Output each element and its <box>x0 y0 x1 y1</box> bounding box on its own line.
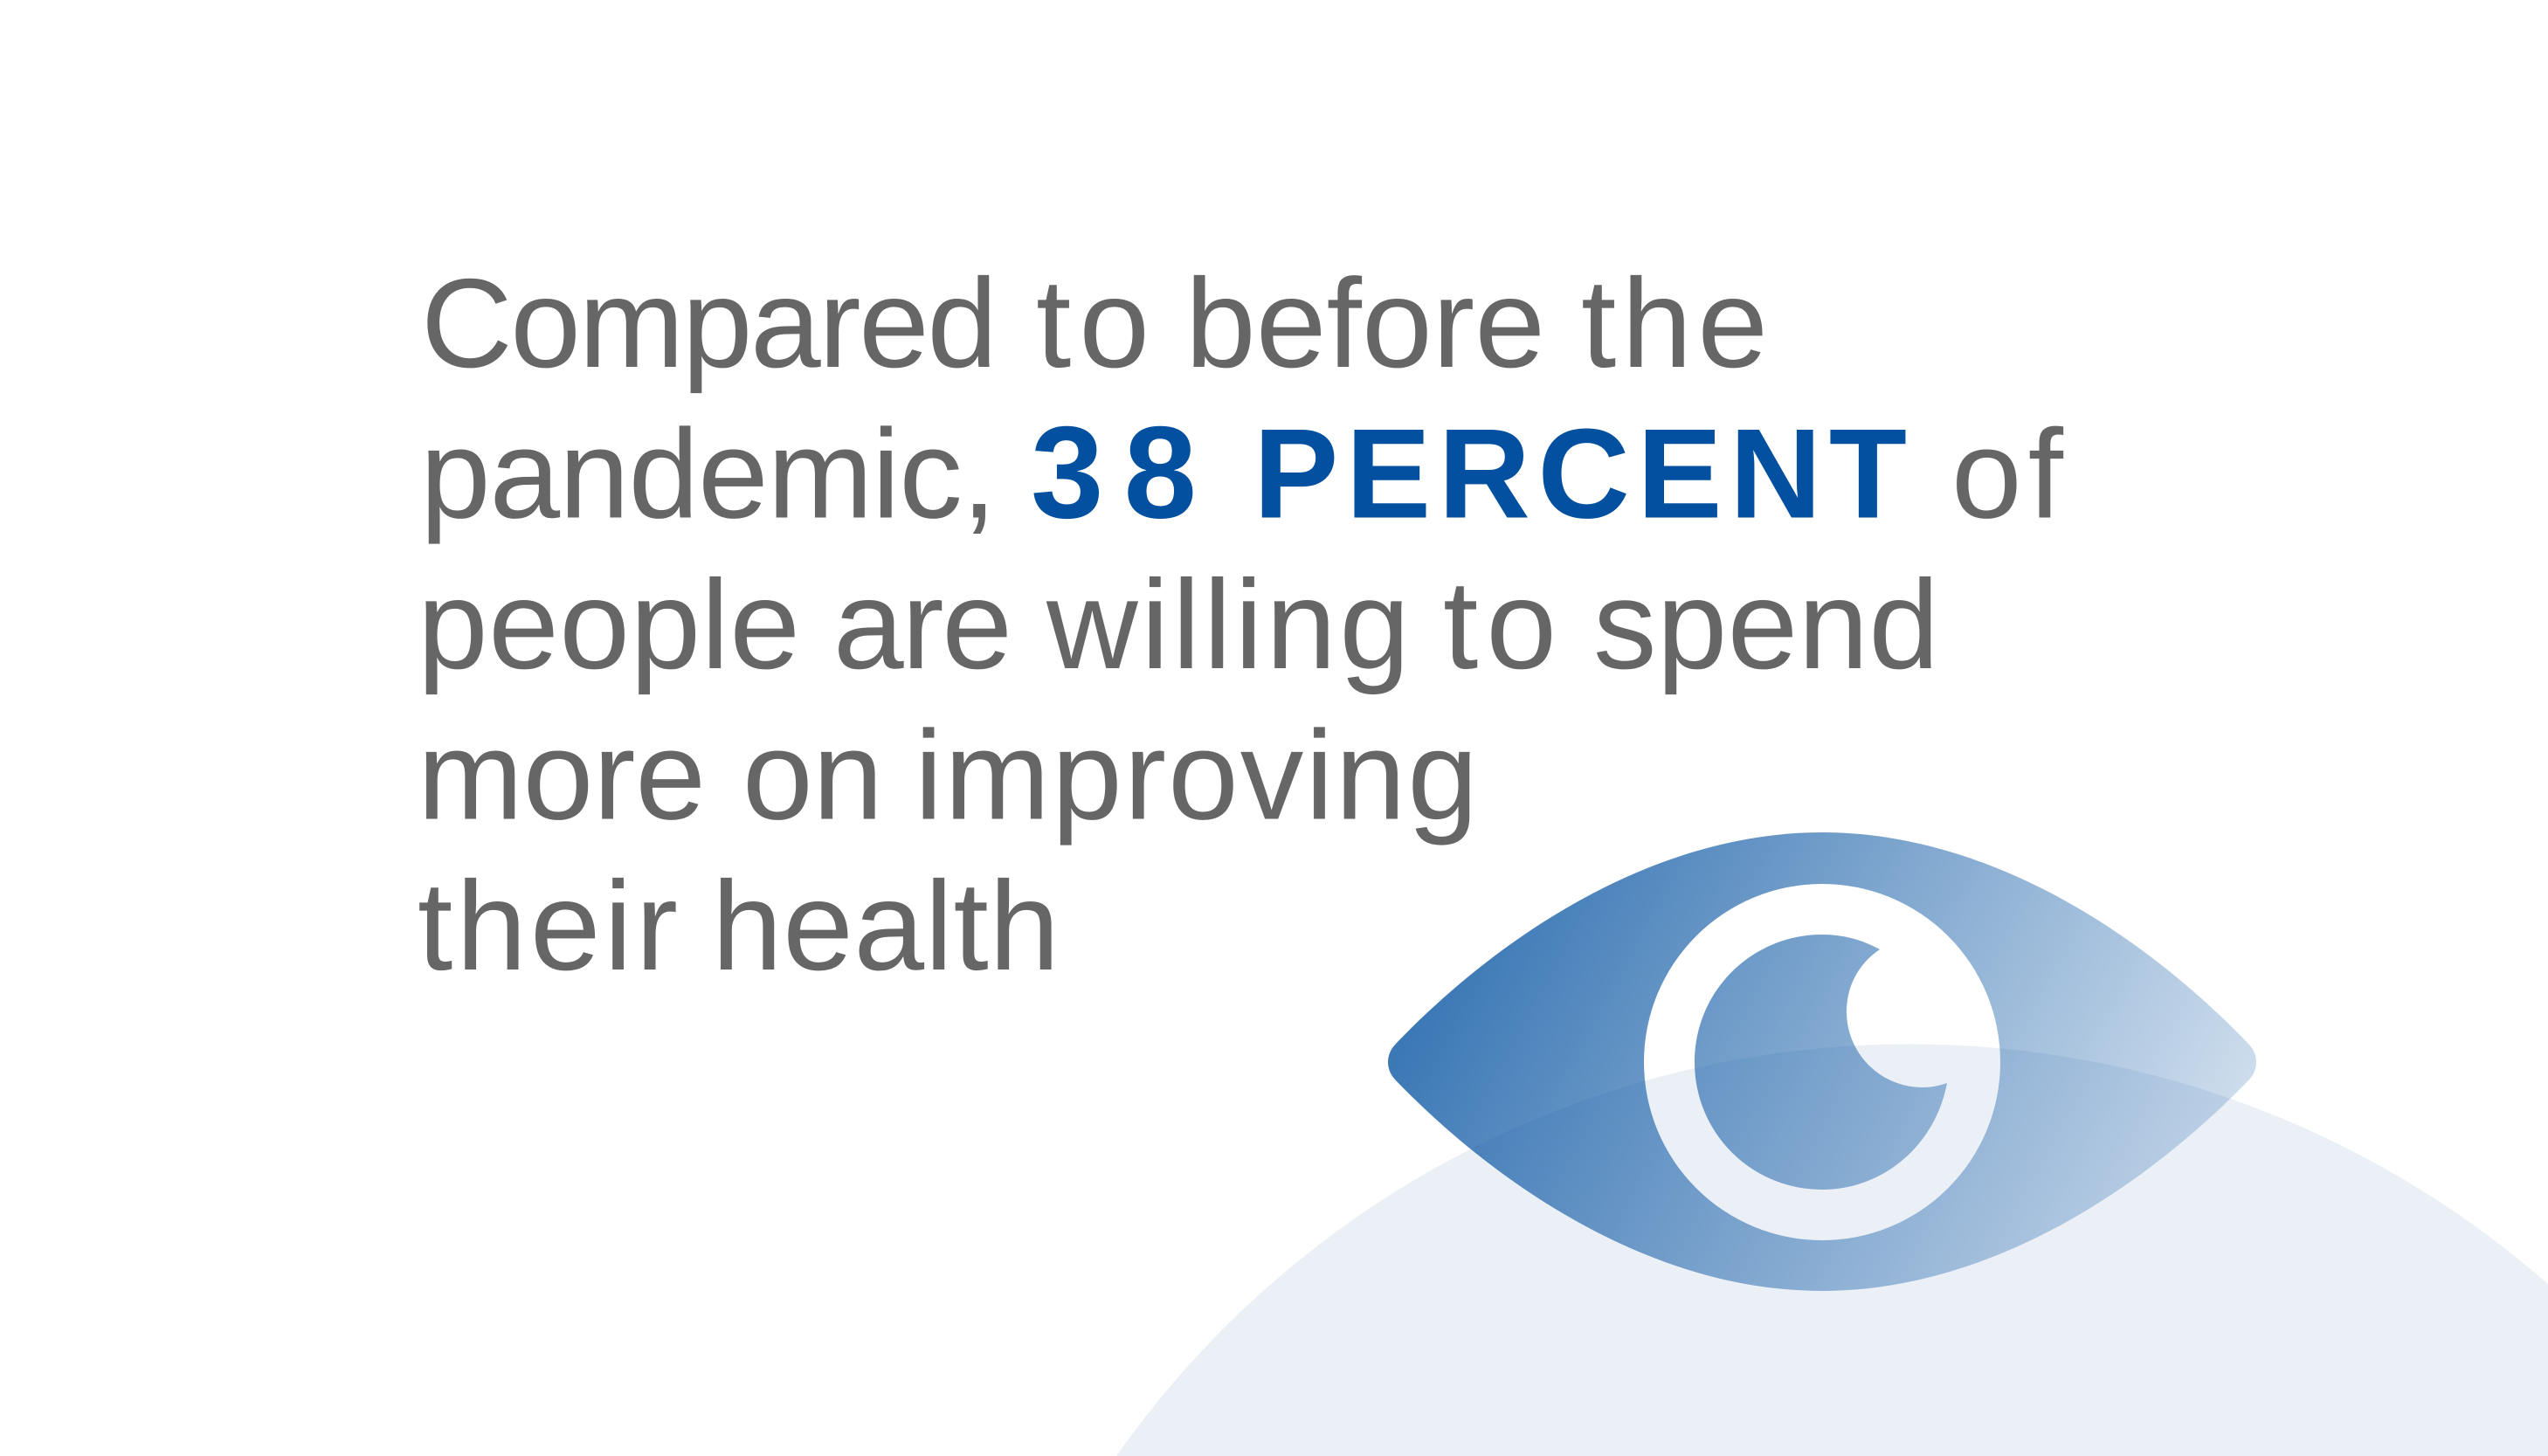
line 3 <box>418 554 1939 695</box>
highlight: 38 percent: 38 <box>1031 398 1197 545</box>
highlight: 38 percent: PERCENT <box>1253 402 1907 545</box>
line 2: of: of <box>1951 404 2064 545</box>
line 4: improving <box>915 704 1478 845</box>
icon: eye <box>1388 832 2256 1291</box>
line 5: health <box>712 855 1060 997</box>
line 1 <box>421 252 1768 394</box>
line 1: the <box>1581 252 1768 394</box>
background circle <box>1116 1044 2548 1456</box>
line 3: willing <box>1046 554 1410 695</box>
statement text <box>418 252 2064 997</box>
line 5: their <box>418 855 678 997</box>
line 3: people <box>418 554 800 695</box>
line 2: pandemic: pandemic, <box>420 404 997 545</box>
line 1: Compared <box>421 252 998 394</box>
line 1: to <box>1036 252 1150 394</box>
line 3: spend <box>1593 554 1939 695</box>
line 4 <box>418 704 1478 845</box>
line 3: to <box>1443 554 1557 695</box>
line 1: before <box>1185 252 1545 394</box>
line 4: more <box>418 704 706 845</box>
line 4: on <box>742 704 883 845</box>
line 5 <box>418 855 1060 997</box>
line 3: are <box>833 554 1012 695</box>
